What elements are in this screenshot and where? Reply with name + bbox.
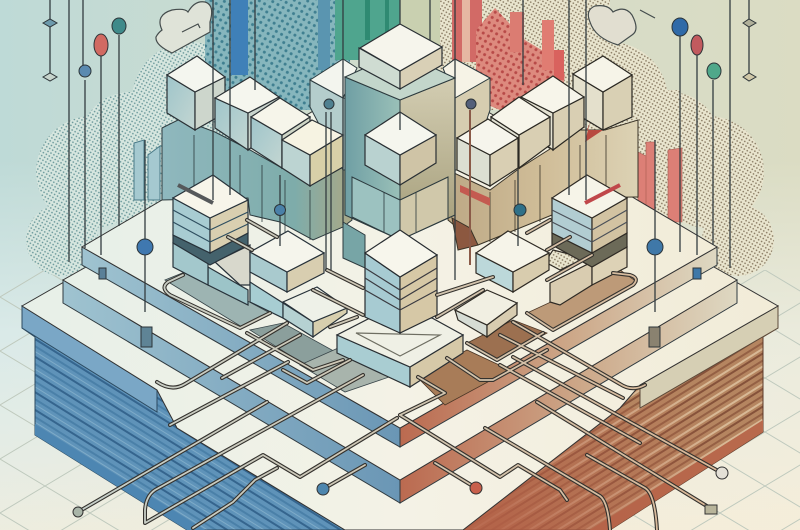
blocks: left row: [167, 56, 343, 186]
pipe terminals: [73, 467, 728, 517]
block 5: [573, 56, 632, 130]
wiring trench: right: [417, 270, 637, 405]
icon: cloud right: [588, 6, 655, 45]
indicator nodes: right: [466, 18, 756, 255]
block 2: [215, 77, 279, 150]
wiring trench: left: [165, 270, 395, 392]
icon: cloud left: [156, 2, 212, 53]
platform tier 1: top face: [22, 90, 778, 530]
background bars: blue and green: [134, 0, 440, 200]
stack: far left: [173, 175, 250, 305]
dotted cloud backdrop: right: [430, 0, 774, 276]
lower block: right: [455, 290, 517, 337]
platform tier 2: side faces: [63, 280, 737, 503]
centre pad: [337, 318, 463, 387]
edge tags: [99, 268, 701, 347]
indicator nodes: left: [43, 18, 334, 255]
stack: mid left: [250, 231, 324, 292]
lower block: left: [250, 282, 347, 337]
wiring pipes: outline: [78, 220, 722, 530]
dotted cloud backdrop: left: [26, 42, 248, 276]
block 8: [457, 119, 518, 186]
platform tier 3: top face: [82, 60, 717, 428]
tower mass: left: [162, 119, 365, 268]
block 6: [521, 76, 584, 150]
block 4: [282, 120, 343, 186]
stack: centre: [365, 230, 437, 333]
stack: far right: [545, 175, 627, 305]
background bars: red: [452, 0, 682, 222]
platform base: red side: [463, 306, 778, 530]
block: centre middle: [365, 112, 436, 185]
platform tier 3: side faces: [82, 247, 717, 447]
wiring pipes: highlight: [78, 220, 722, 530]
block 3: [251, 98, 310, 168]
blocks: right row: [457, 56, 632, 186]
platform base: blue side: [22, 306, 345, 530]
hanging connector lines: [50, 0, 749, 312]
block 7: [491, 97, 550, 168]
platform tier 2: top face: [63, 90, 737, 480]
tower mass: right: [448, 120, 638, 250]
block: centre top: [359, 24, 442, 89]
tower: centre back: [310, 52, 490, 240]
block 1: [167, 56, 225, 130]
stack: mid right: [476, 231, 549, 292]
